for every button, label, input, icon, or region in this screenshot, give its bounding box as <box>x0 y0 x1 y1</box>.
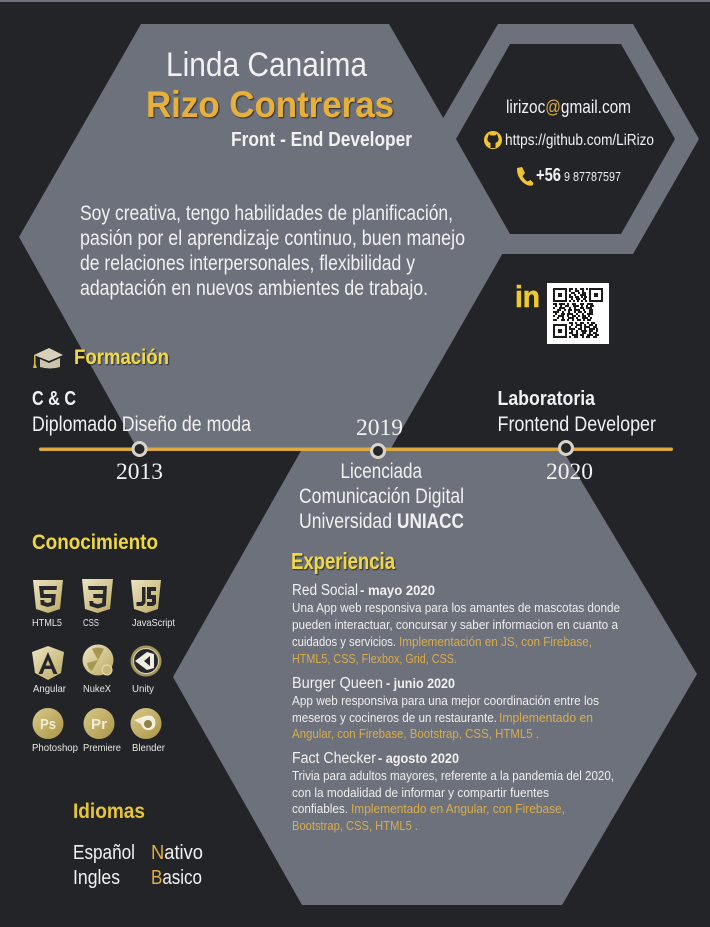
icon: graduation cap <box>33 348 63 368</box>
timeline entry: Licenciada: Licenciada <box>340 460 422 483</box>
timeline entry: Laboratoria: Laboratoria <box>498 387 596 410</box>
phone number: 9 87787597 <box>564 169 621 184</box>
contact details <box>484 97 654 186</box>
experience: Burger Queen: Angular, con Firebase, Bootstrap, CSS, HTML5 . <box>292 726 539 741</box>
title: name and role: Front - End Developer <box>231 129 412 151</box>
phone number: +56 <box>536 165 561 185</box>
experience: Fact Checker: confiables. <box>292 801 348 816</box>
icon: github <box>484 131 502 149</box>
icon: Blender <box>130 708 165 754</box>
icon: Angular: Angular <box>33 683 66 695</box>
experience: Red Social: Implementación en JS, con Firebase, <box>399 634 592 649</box>
experience: Fact Checker: Fact Checker <box>292 750 376 767</box>
experience: Red Social: Red Social <box>292 582 358 599</box>
github url: https://github.com/LiRizo <box>505 132 654 149</box>
text block: profile summary: pasión por el aprendizaje continuo, buen manejo <box>80 226 465 250</box>
experience: Fact Checker: con la modalidad de informar y compartir fuentes <box>292 785 549 800</box>
experience: Burger Queen: - junio 2020 <box>386 676 455 691</box>
languages list <box>73 842 203 889</box>
panel: large top hexagon <box>19 24 512 450</box>
icon: JavaScript <box>131 580 175 629</box>
text block: profile summary <box>80 201 465 300</box>
icon: Photoshop: Photoshop <box>32 742 78 754</box>
experience: Red Social: cuidados y servicios. <box>292 634 396 649</box>
experience: Fact Checker: Implementado en Angular, con Firebase, <box>351 801 565 816</box>
heading: Formación <box>33 346 169 369</box>
experience: Red Social: HTML5, CSS, Flexbox, Grid, CSS. <box>292 651 457 666</box>
timeline entry: Licenciada: UNIACC <box>397 510 464 533</box>
icon: NukeX: NukeX <box>83 683 111 695</box>
timeline entry: Laboratoria: Frontend Developer <box>498 413 656 436</box>
title: name and role: Rizo Contreras <box>146 84 394 125</box>
experience: Fact Checker: - agosto 2020 <box>378 751 459 766</box>
timeline <box>39 442 673 458</box>
heading: Experiencia: Experiencia <box>291 548 395 574</box>
QR code <box>547 283 609 344</box>
experience: Burger Queen: meseros y cocineros de un restaurante. <box>292 710 497 725</box>
timeline entry: Laboratoria <box>498 387 656 484</box>
experience: Red Social <box>292 582 620 666</box>
experience: Red Social: pueden interactuar, concursar y saber informacion en cuanto a <box>292 617 619 632</box>
timeline entry: C & C: Diplomado Diseño de moda <box>32 413 251 436</box>
panel: contact hexagon frame <box>431 24 699 254</box>
heading: Idiomas: Idiomas <box>73 800 145 823</box>
panel: large lower hexagon <box>173 449 697 905</box>
icon: NukeX <box>82 644 114 695</box>
icon: Premiere: Premiere <box>83 742 121 754</box>
timeline entry: Licenciada: Universidad <box>299 510 392 533</box>
languages list: Basico <box>151 867 202 889</box>
text block: profile summary: Soy creativa, tengo habilidades de planificación, <box>80 201 453 225</box>
icon: Angular <box>32 646 66 695</box>
icon: Photoshop <box>32 708 78 754</box>
title: name and role <box>146 46 412 151</box>
experience: Burger Queen: Implementado en <box>499 710 593 725</box>
phone number <box>536 165 621 185</box>
experience: Burger Queen <box>292 675 599 741</box>
timeline entry: C & C <box>32 388 251 484</box>
heading: Formación: Formación <box>74 346 169 369</box>
icon: Unity: Unity <box>132 683 155 695</box>
title: name and role: Linda Canaima <box>166 46 367 84</box>
icon: Premiere <box>83 708 121 754</box>
milestone 2019 <box>372 444 384 458</box>
experience: Burger Queen: App web responsiva para una mejor coordinación entre los <box>292 693 599 708</box>
icon: HTML5: HTML5 <box>32 617 62 629</box>
text block: profile summary: adaptación en nuevos ambientes de trabajo. <box>80 276 428 300</box>
timeline entry: Licenciada: 2019 <box>356 415 403 440</box>
timeline entry: Laboratoria: 2020 <box>546 459 593 484</box>
languages list: Nativo <box>151 842 203 864</box>
icon: Premiere: Pr <box>91 716 107 733</box>
timeline entry: C & C: 2013 <box>116 459 163 484</box>
experience: Fact Checker: Trivia para adultos mayores, referente a la pandemia del 2020, <box>292 768 614 783</box>
experience: Fact Checker: Bootstrap, CSS, HTML5 . <box>292 818 418 833</box>
text block: profile summary: de relaciones interpersonales, flexibilidad y <box>80 251 415 275</box>
experience: Burger Queen: Burger Queen <box>292 675 383 692</box>
timeline entry: C & C: C & C <box>32 388 76 410</box>
skills icon grid <box>32 579 175 754</box>
heading: Conocimiento: Conocimiento <box>32 531 158 554</box>
icon: linkedin: in <box>515 279 540 314</box>
email: lirizoc@gmail.com <box>506 97 631 117</box>
languages list: Español <box>73 842 135 864</box>
icon: JavaScript: JavaScript <box>132 617 175 629</box>
timeline entry: Licenciada: Comunicación Digital <box>299 485 464 508</box>
icon: Blender: Blender <box>132 742 165 754</box>
panel: contact hexagon interior <box>456 44 675 234</box>
timeline entry: Licenciada <box>299 415 464 533</box>
experience: Red Social: - mayo 2020 <box>360 583 435 598</box>
icon: Unity <box>130 646 162 695</box>
experience: Red Social: Una App web responsiva para los amantes de mascotas donde <box>292 600 620 615</box>
icon: phone <box>517 167 534 186</box>
experience: Fact Checker <box>292 750 614 833</box>
icon: CSS: CSS <box>83 617 99 629</box>
icon: HTML5 <box>32 580 63 629</box>
milestone 2020 <box>560 442 572 454</box>
milestone 2013 <box>133 442 146 456</box>
languages list: Ingles <box>73 867 120 889</box>
icon: CSS <box>82 579 113 629</box>
icon: Photoshop: Ps <box>40 716 56 733</box>
